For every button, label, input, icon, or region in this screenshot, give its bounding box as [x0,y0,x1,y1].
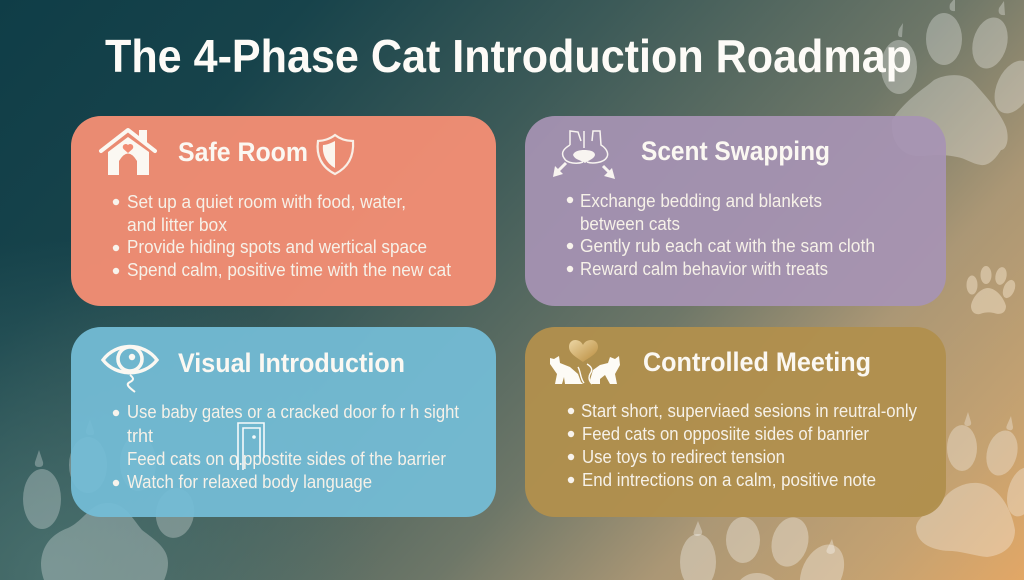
bullet list: Safe Room: Spend calm, positive time with the new cat [127,260,451,280]
bullet list: Scent Swapping: Exchange bedding and blankets [580,191,822,211]
bullet list: Scent Swapping: between cats [580,214,680,234]
icon: cats with heart [550,340,620,384]
paw: small right [966,266,1018,314]
panel: Controlled Meeting [525,327,946,517]
title: The 4-Phase Cat Introduction Roadmap [105,30,912,82]
bullet list: Scent Swapping: Reward calm behavior with treats [580,259,828,279]
panel: Visual Introduction [71,327,496,517]
bullet list: Scent Swapping [567,191,875,279]
bullet list: Controlled Meeting: End intrections on a calm, positive note [582,470,876,490]
heading: Safe Room: Safe Room [178,137,308,167]
panel: Scent Swapping [525,116,946,306]
icon: house with heart [101,130,155,175]
icon: eye [103,346,157,392]
paw: bottom right [916,412,1024,557]
icon: cat nose with arrows [553,131,615,179]
heading: Controlled Meeting: Controlled Meeting [643,347,871,377]
bullet list: Visual Introduction [113,402,459,492]
panel: Safe Room [71,116,496,306]
bullet list: Visual Introduction: Watch for relaxed body language [127,472,372,492]
bullet list: Controlled Meeting: Feed cats on opposiite sides of banrier [582,424,869,444]
bullet list: Visual Introduction: trht [127,426,153,446]
paw: bottom left [23,419,197,580]
bullet list: Safe Room: and litter box [127,215,227,235]
bullet list: Controlled Meeting: Start short, superviaed sesions in reutral-only [581,401,917,421]
bullet list: Scent Swapping: Gently rub each cat with the sam cloth [580,236,875,256]
heading: Scent Swapping: Scent Swapping [641,136,830,166]
paw: top right [881,0,1024,165]
bullet list: Safe Room: Provide hiding spots and wertical space [127,237,427,257]
paw: bottom center [680,513,853,580]
bullet list: Controlled Meeting: Use toys to redirect tension [582,447,785,467]
icon: door [238,423,264,470]
bullet list: Controlled Meeting [568,401,917,490]
bullet list: Safe Room: Set up a quiet room with food, water, [127,192,406,212]
bullet list: Safe Room [113,192,451,280]
bullet list: Visual Introduction: Feed cats on o.ppostite sides of the barrier [127,449,446,469]
heading: Visual Introduction: Visual Introduction [178,348,405,378]
bullet list: Visual Introduction: Use baby gates or a cracked door fo r h sight [127,402,459,422]
icon: shield [318,135,353,174]
